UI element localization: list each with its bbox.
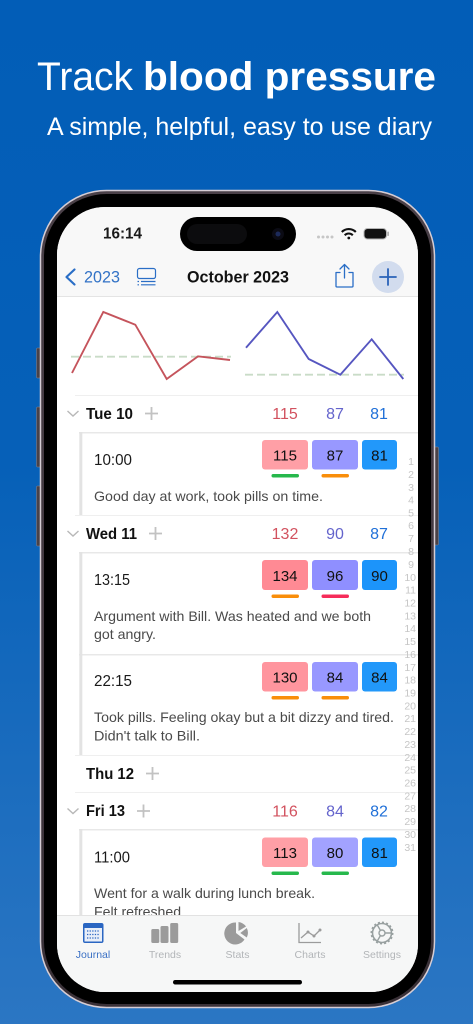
month heading: October 2023 [187,268,289,286]
day index strip: 16 [404,649,416,661]
day index strip: 23 [404,739,416,751]
tab bar [57,915,418,992]
day index strip: 4 [408,494,414,506]
day index strip: 9 [408,559,414,571]
day row: Fri 13: 84 [326,804,344,820]
tab: Charts: Charts [295,949,325,961]
add button [372,261,404,293]
entry card: 11:00: Felt refreshed. [94,904,185,920]
entry card: 13:15: Argument with Bill. Was heated and we both [94,608,371,624]
day index strip: 12 [404,598,416,610]
day index strip: 18 [404,674,416,686]
icon: battery [364,228,389,239]
status time: 16:14 [103,226,142,242]
divider [75,755,418,756]
day row: Wed 11: 87 [370,526,388,543]
reading badges [262,838,397,875]
entry card: 10:00 [79,432,418,515]
phone [36,190,438,1008]
day index strip: 6 [408,520,414,532]
divider [75,515,418,516]
reading badges: 113 [273,845,297,862]
entry card: 22:15: Took pills. Feeling okay but a bit dizzy and tired. [94,709,394,725]
day row: Fri 13: Fri 13 [86,803,125,820]
divider [75,792,418,793]
reading badges [262,560,397,598]
tab: Settings [363,922,401,961]
entry card: 13:15 [79,552,418,654]
entry card: 13:15: 13:15 [94,572,130,589]
dynamic island [180,217,296,251]
entry card: 10:00: Good day at work, took pills on time. [94,488,323,504]
tab: Settings: Settings [363,949,401,961]
chart: systolic [71,312,231,379]
icon: list view [138,268,156,285]
reading badges: 84 [371,670,388,686]
day index strip: 3 [408,482,414,494]
tab: Trends [149,923,181,961]
day row: Fri 13: 116 [272,804,298,820]
day row: Tue 10: 87 [326,406,344,423]
day row: Wed 11: 132 [272,526,298,543]
signal dots [317,236,334,238]
day row: Thu 12: Thu 12 [86,766,134,783]
day row: Wed 11 [67,527,388,540]
icon: wifi [342,229,356,239]
reading badges [262,662,397,700]
phone side buttons [36,348,438,546]
chart: diastolic [245,312,404,379]
entry card: 22:15: Didn't talk to Bill. [94,728,200,744]
day index strip: 21 [404,713,416,725]
tab: Charts [295,923,325,961]
tab: Stats: Stats [226,949,249,961]
tab: Stats [224,922,249,961]
reading badges: 81 [371,845,388,862]
day index strip: 20 [404,700,416,712]
entry card: 11:00 [79,829,418,920]
reading badges: 134 [272,568,298,585]
day index strip: 26 [404,778,416,790]
day index strip: 11 [405,584,416,596]
day index strip: 17 [404,662,416,674]
reading badges: 90 [371,568,388,585]
day index strip: 24 [404,752,416,764]
day index strip: 30 [404,829,416,841]
day row: Tue 10: Tue 10 [86,406,133,423]
day index strip: 10 [404,572,416,584]
phone frame [40,190,434,1008]
day index strip: 19 [404,688,416,700]
entry card: 22:15: 22:15 [94,673,132,690]
title: blood pressure [143,55,436,99]
day index strip: 29 [404,816,416,828]
home indicator [173,980,302,984]
day row: Fri 13: 82 [370,804,388,820]
navigation header [57,207,418,297]
tab: Journal [76,923,110,958]
reading badges: 115 [273,448,297,464]
day index strip: 25 [404,764,416,776]
entry card: 10:00: 10:00 [94,452,132,469]
day index strip: 2 [408,469,414,481]
divider [75,395,418,396]
screen [57,207,418,992]
day index strip: 5 [408,508,414,520]
reading badges: 130 [272,670,298,686]
day index strip: 8 [408,546,414,558]
day index strip: 28 [404,803,416,815]
back button: 2023 [84,268,120,286]
day row: Wed 11: Wed 11 [86,526,137,543]
subtitle: A simple, helpful, easy to use diary [47,113,432,141]
day row: Tue 10: 115 [272,406,298,423]
entry card: 13:15: got angry. [94,626,156,642]
day row: Tue 10: 81 [370,406,388,423]
reading badges: 80 [327,845,343,862]
day index strip: 31 [404,842,416,854]
day index strip: 1 [408,456,414,468]
reading badges: 87 [327,448,343,464]
day row: Thu 12 [86,767,159,780]
day row: Tue 10 [67,407,388,420]
entry card: 11:00: 11:00 [94,850,130,866]
entry card: 22:15 [79,654,418,755]
title: Track [37,55,134,99]
tab: Trends: Trends [149,949,181,961]
back button [66,268,120,286]
day index strip: 14 [404,623,416,635]
reading badges: 96 [327,568,343,585]
day index strip [404,456,416,854]
day index strip: 13 [404,610,416,622]
icon: share [336,264,353,287]
tab: Journal: Journal [76,949,110,961]
entry card: 11:00: Went for a walk during lunch break. [94,885,315,901]
day index strip: 22 [404,726,416,738]
day row: Fri 13 [67,804,388,818]
reading badges: 84 [327,670,343,686]
day row: Wed 11: 90 [326,526,344,543]
reading badges [262,440,397,478]
day index strip: 27 [404,790,416,802]
day index strip: 15 [404,636,416,648]
reading badges: 81 [371,448,388,464]
day index strip: 7 [408,533,414,545]
